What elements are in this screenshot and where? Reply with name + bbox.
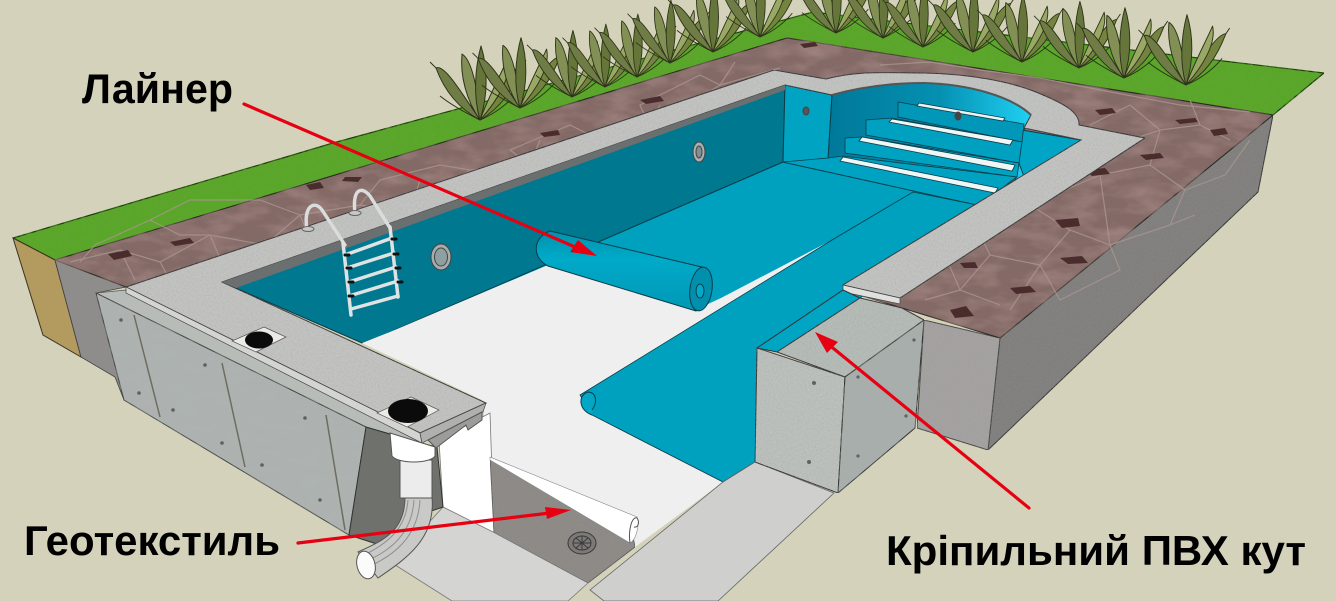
drain pipe — [354, 412, 482, 581]
pipe end — [354, 549, 378, 581]
pool back wall — [222, 85, 785, 343]
gravel base left — [55, 260, 126, 400]
stair alcove wall — [828, 83, 1031, 180]
step 1 — [898, 102, 1024, 142]
label: PVC fixing corner: Кріпильний ПВХ кут — [886, 527, 1306, 574]
right outer wall — [988, 115, 1273, 450]
paving cracks — [70, 62, 1250, 310]
skimmer bracket — [428, 412, 482, 448]
floor drain — [568, 532, 596, 554]
coping front edge right — [843, 285, 900, 304]
liner sheet edge — [580, 192, 977, 482]
gravel pit floor — [490, 457, 635, 583]
step 2 — [866, 118, 1022, 163]
handrails — [306, 190, 390, 245]
skimmer covers — [232, 327, 439, 427]
step 4 — [783, 156, 1017, 205]
pipe collar — [390, 433, 435, 462]
coping inner lip — [222, 85, 785, 288]
gravel base front — [917, 320, 1000, 450]
wall panel seams — [134, 315, 345, 530]
soil cross-section — [13, 238, 81, 357]
liner roll — [536, 231, 715, 312]
block front — [755, 348, 845, 493]
right front strip — [590, 462, 834, 601]
coping end edge — [420, 403, 486, 443]
right side wall by stairs — [1019, 130, 1081, 182]
paved surround — [55, 38, 1273, 338]
label: liner: Лайнер — [82, 65, 233, 112]
block top — [777, 298, 924, 377]
front light strip — [392, 507, 588, 601]
grass lawn — [13, 12, 1324, 260]
wall tie holes — [119, 318, 322, 502]
coping — [126, 70, 1145, 443]
stairs — [783, 102, 1024, 205]
concrete block right — [755, 290, 924, 493]
pool floor — [395, 162, 977, 482]
rungs — [345, 238, 398, 309]
white wall section — [439, 413, 494, 533]
PVC corner strip — [757, 290, 860, 352]
arrow: geotextile — [298, 507, 571, 543]
block side — [838, 320, 924, 493]
arrow: PVC corner — [815, 332, 1029, 508]
rolled geotextile — [490, 457, 638, 543]
liner roll end curl — [581, 392, 595, 415]
step 3 — [845, 137, 1019, 177]
geotextile curled end — [629, 518, 638, 543]
end wall — [783, 85, 832, 172]
pipe bend — [358, 497, 432, 578]
wall top ledge — [96, 290, 422, 443]
coping front edge left — [126, 287, 422, 443]
pipe vertical — [400, 460, 432, 498]
wall cross section — [349, 427, 443, 545]
concrete wall left — [96, 290, 422, 535]
arrow: liner — [244, 104, 597, 256]
roll end — [687, 266, 715, 312]
ladder — [302, 190, 402, 315]
label: geotextile: Геотекстиль — [24, 517, 280, 564]
underwater lights — [431, 107, 961, 270]
plants row — [430, 0, 1230, 120]
geotextile white floor — [362, 240, 832, 570]
coping inner lip arc — [832, 83, 1031, 115]
paving dark stones — [108, 42, 1228, 318]
